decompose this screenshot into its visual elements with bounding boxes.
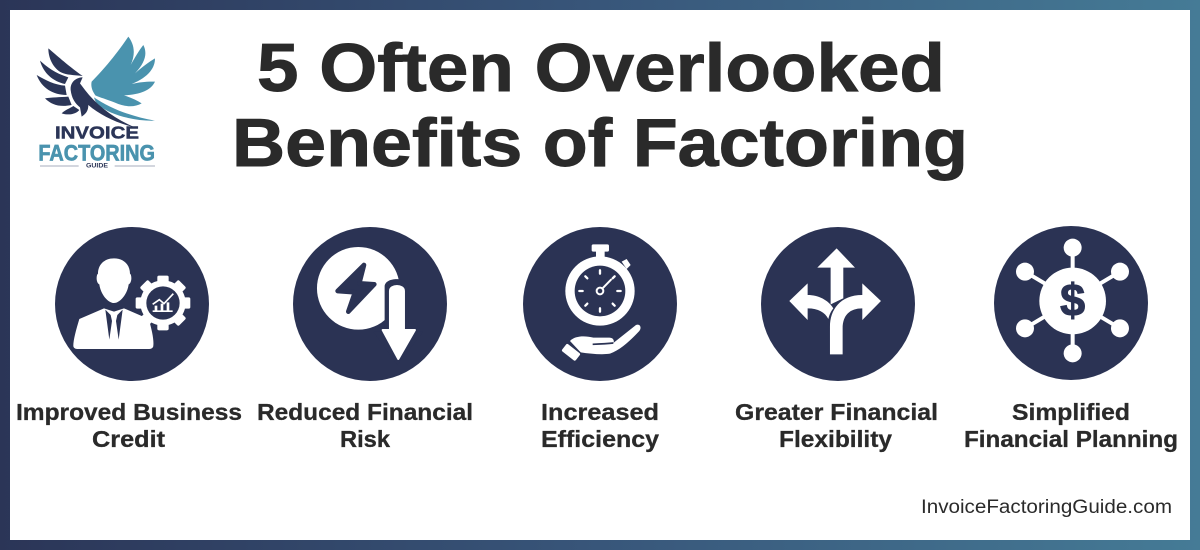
icon: dollar hub network bbox=[994, 226, 1148, 380]
logo: word GUIDE: GUIDE bbox=[86, 164, 108, 170]
title: Benefits of Factoring bbox=[232, 105, 968, 181]
logo: word INVOICE: INVOICE bbox=[55, 122, 139, 142]
label: simplified financial planning bbox=[964, 399, 1178, 452]
logo: navy wing and eagle head bbox=[37, 48, 135, 127]
logo bbox=[37, 37, 155, 170]
logo: teal wing bbox=[91, 37, 155, 121]
label: increased efficiency bbox=[541, 399, 659, 452]
label: greater financial flexibility bbox=[735, 399, 938, 452]
label: reduced financial risk: Reduced Financial bbox=[257, 399, 473, 425]
label: improved business credit bbox=[16, 399, 242, 452]
label: increased efficiency: Efficiency bbox=[541, 426, 659, 452]
icon: three way arrows bbox=[761, 227, 915, 381]
label: improved business credit: Improved Business bbox=[16, 399, 242, 425]
label: increased efficiency: Increased bbox=[541, 399, 659, 425]
icon: businessman with gear bbox=[55, 227, 209, 381]
title bbox=[232, 30, 968, 181]
dollar sign: $ bbox=[1060, 275, 1085, 326]
label: improved business credit: Credit bbox=[92, 426, 165, 452]
label: reduced financial risk: Risk bbox=[340, 426, 390, 452]
label: reduced financial risk bbox=[257, 399, 473, 452]
label: simplified financial planning: Simplified bbox=[1012, 399, 1130, 425]
label: simplified financial planning: Financial Planning bbox=[964, 426, 1178, 452]
title: 5 Often Overlooked bbox=[257, 30, 945, 106]
icon: lightning with down arrow bbox=[293, 227, 447, 381]
icon: stopwatch on hand bbox=[523, 227, 677, 381]
website url: InvoiceFactoringGuide.com bbox=[921, 497, 1172, 518]
label: greater financial flexibility: Greater Financial bbox=[735, 399, 938, 425]
label: greater financial flexibility: Flexibility bbox=[779, 426, 892, 452]
logo: word FACTORING: FACTORING bbox=[38, 141, 155, 166]
